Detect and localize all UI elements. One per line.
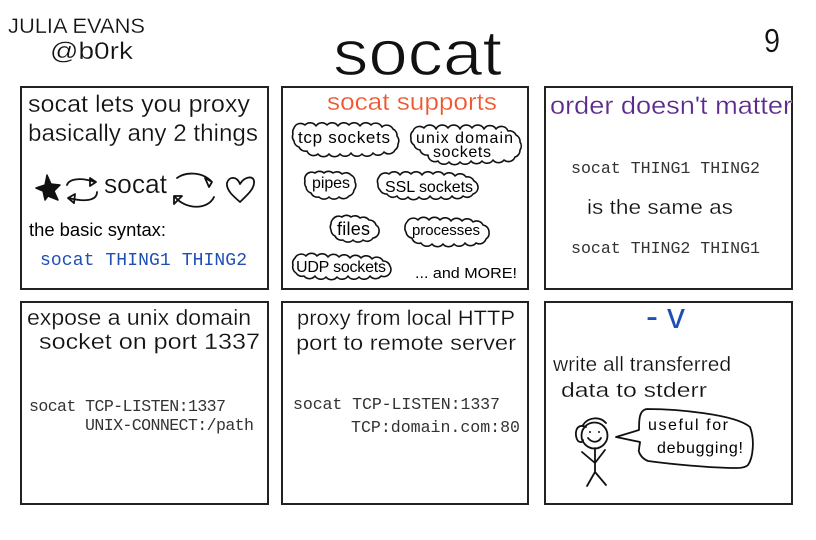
command [29,397,254,435]
socat label: socat [104,169,167,199]
heading: port to remote server [296,332,516,355]
panel: proxy from local HTTP [282,302,528,504]
cloud: pipes: pipes [312,175,350,192]
callout: debugging! [657,440,743,457]
cloud: unix domain sockets [411,125,521,165]
cloud: pipes [305,171,356,199]
page number: 9 [764,22,780,59]
heading: socket on port 1337 [39,329,260,354]
description [552,354,731,402]
icon: stick figure with headphones [576,418,608,486]
cloud: unix domain sockets: sockets [433,144,491,161]
panel: socat supports [282,87,528,289]
cloud: files [330,215,379,242]
icon: large exchange arrows [174,174,214,207]
cloud: tcp sockets [292,123,399,157]
command: socat TCP-LISTEN:1337 [29,397,226,416]
heading: socat supports [327,89,497,116]
heading [296,307,516,355]
cloud: UDP sockets: UDP sockets [296,259,386,276]
heading: order doesn't matter [550,92,792,120]
heading [27,305,260,354]
cloud: tcp sockets: tcp sockets [298,128,390,147]
command: socat TCP-LISTEN:1337 [293,395,500,414]
panel: -v flag [545,295,792,504]
author credit: JULIA EVANS [8,15,145,38]
description: data to stderr [561,380,707,402]
and more note: ... and MORE! [415,265,517,282]
panel: socat proxy intro [21,87,268,289]
heading: basically any 2 things [28,120,258,147]
cloud: processes: processes [412,222,480,239]
cloud: SSL sockets: SSL sockets [385,179,473,196]
title: socat [333,17,502,89]
icon: star [36,175,60,200]
command: UNIX-CONNECT:/path [85,416,254,435]
command one: socat THING1 THING2 [571,159,760,178]
cloud: files: files [337,219,370,239]
heading: proxy from local HTTP [297,307,515,330]
heading: socat lets you proxy [28,91,250,118]
callout [616,409,753,468]
command two: socat THING2 THING1 [571,239,760,258]
same-as text: is the same as [587,197,733,219]
callout: useful for [648,417,729,434]
heading [28,91,258,147]
command: TCP:domain.com:80 [351,418,520,437]
description: write all transferred [552,354,731,376]
icon: heart [227,177,254,202]
panel: expose a unix domain socket [21,302,268,504]
heading: -v [646,295,685,336]
command [293,395,520,437]
cloud: unix domain sockets: unix domain [416,130,513,147]
panel: order doesn't matter [545,87,792,289]
syntax command: socat THING1 THING2 [40,251,247,271]
heading: expose a unix domain [27,305,251,330]
icon: small exchange arrows [67,178,97,203]
author credit [8,15,145,65]
author credit: @b0rk [50,38,134,65]
cloud: SSL sockets [377,172,478,200]
cloud: UDP sockets [293,253,391,280]
syntax label: the basic syntax: [29,220,166,240]
cloud: processes [405,217,489,247]
